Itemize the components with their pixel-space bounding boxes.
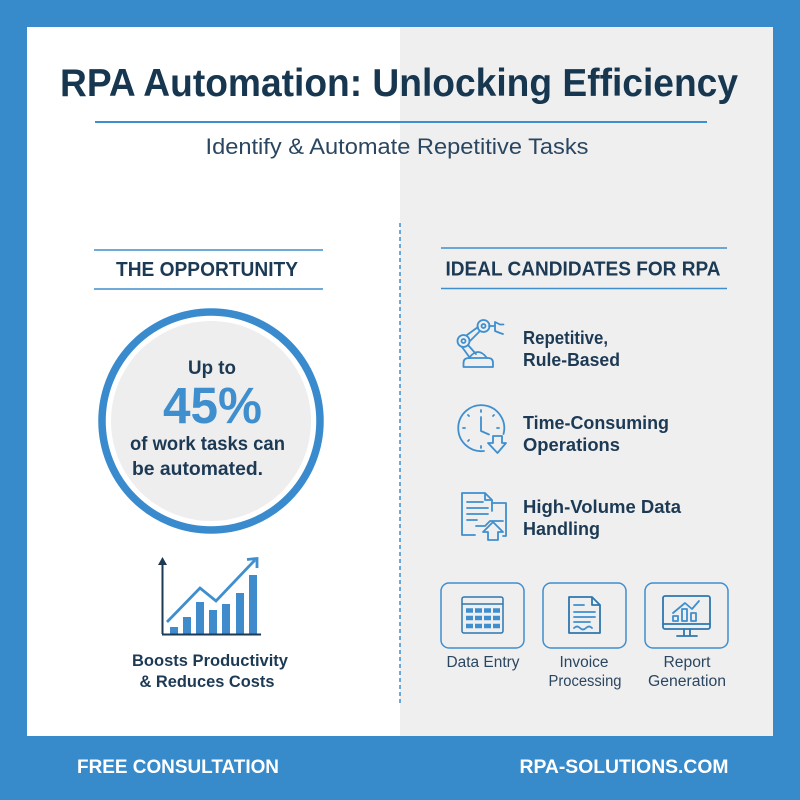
heading: ideal candidates: IDEAL CANDIDATES FOR RPA — [446, 258, 720, 280]
card: invoice processing — [543, 583, 626, 690]
label: invoice processing: Processing — [548, 673, 622, 690]
label: repetitive: Rule-Based — [523, 350, 620, 370]
stat circle: 45%: 45% — [163, 377, 262, 434]
icon: growth bar chart — [158, 557, 261, 634]
stat circle: 45% — [102, 312, 320, 530]
panel: right grey background — [400, 27, 773, 736]
label: report generation: Generation — [648, 673, 726, 690]
icon: robot arm — [458, 320, 504, 367]
caption: boosts productivity: Boosts Productivity — [132, 651, 289, 670]
label: time-consuming — [523, 413, 669, 455]
stat circle: 45%: of work tasks can — [130, 433, 285, 455]
stat circle: 45%: Up to — [188, 357, 236, 379]
footer: free consultation: FREE CONSULTATION — [77, 756, 279, 778]
label: invoice processing: Invoice — [560, 654, 608, 671]
card: report generation — [645, 583, 728, 690]
label: repetitive — [523, 328, 620, 370]
label: time-consuming: Operations — [523, 435, 620, 455]
label: report generation — [648, 654, 726, 690]
icon: clock — [458, 405, 506, 453]
label: high-volume: High-Volume Data — [523, 497, 682, 517]
caption: boosts productivity — [132, 651, 289, 691]
stat circle: 45%: be automated. — [132, 458, 263, 480]
label: time-consuming: Time-Consuming — [523, 413, 669, 433]
label: high-volume: Handling — [523, 519, 600, 539]
caption: boosts productivity: & Reduces Costs — [140, 672, 274, 691]
panel: left white background — [27, 27, 400, 736]
footer: website: RPA-SOLUTIONS.COM — [520, 756, 728, 778]
label: repetitive: Repetitive, — [523, 328, 608, 348]
label: data entry: Data Entry — [446, 654, 520, 671]
label: report generation: Report — [664, 654, 711, 671]
card: data entry — [441, 583, 524, 671]
title: RPA Automation: Unlocking Efficiency — [60, 62, 739, 105]
subtitle: Identify & Automate Repetitive Tasks — [206, 134, 588, 159]
label: high-volume — [523, 497, 682, 539]
heading: the opportunity: THE OPPORTUNITY — [116, 259, 299, 281]
label: invoice processing — [548, 654, 622, 690]
icon: documents with upload arrow — [462, 493, 506, 540]
